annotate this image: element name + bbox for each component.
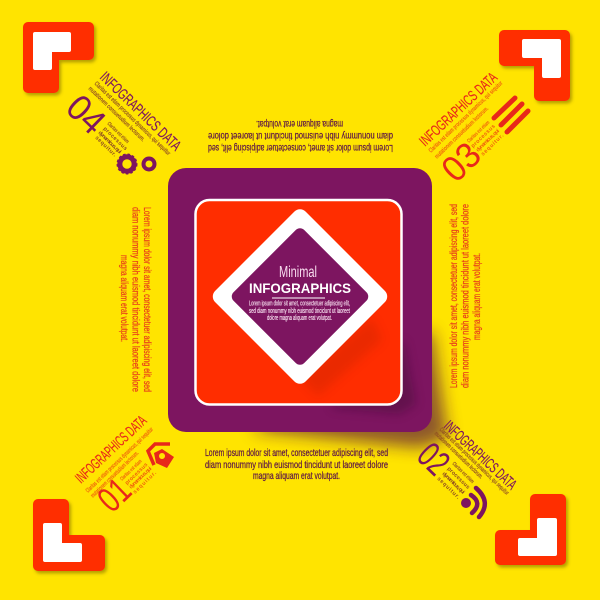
corner tile: bottom right [500, 499, 561, 560]
callout 02: Claritas est etiam [451, 461, 475, 485]
callout 01: sequitur. [132, 470, 158, 495]
bottom text block: Lorem ipsum dolor sit amet, consectetuer adipiscing elit, sed [205, 447, 388, 459]
center heading: Minimal [279, 264, 317, 281]
callout 02 [409, 417, 520, 517]
callout 04: 04 [58, 86, 114, 142]
corner tile: top right [504, 35, 565, 96]
callout 04: Claritas est etiam processus dynamicus, qui sequitur [93, 80, 172, 157]
callout 04: dynamicus, qui [97, 130, 123, 156]
top text block: diam nonummy nibh euismod tincidunt ut laoreet dolore [208, 130, 393, 142]
right text block: Lorem ipsum dolor sit amet, consectetuer adipiscing elit, sed [448, 204, 460, 388]
callout 04: Claritas est etiam [106, 121, 130, 145]
center body text: Lorem ipsum dolor sit amet, consectetuer adipiscing elit, [249, 300, 350, 308]
callout 02: INFOGRAPHICS DATA [440, 417, 520, 493]
callout 04: INFOGRAPHICS DATA [96, 69, 184, 155]
icon: pentagon with chevron [148, 444, 174, 468]
callout 01: mutationem consuetudium lectorum. [90, 450, 141, 499]
callout 01 [72, 412, 174, 520]
icon: three bars [494, 98, 528, 132]
callout 02: Claritas est etiam processus dynamicus, qui sequitur [438, 426, 510, 497]
corner tile: bottom left [38, 504, 100, 566]
center body text: sed diam nonummy nibh euismod tincidunt ut laoreet [249, 308, 350, 315]
callout 03: sequitur. [480, 133, 506, 157]
callout 03: dynamicus, qui [475, 128, 501, 153]
callout 01: processus [124, 462, 149, 486]
callout 03: Claritas est etiam processus dynamicus, qui sequitur [428, 80, 505, 154]
callout 04: mutationem consuetudium lectorum. [87, 85, 146, 143]
callout 02: sequitur. [436, 476, 461, 501]
callout 01: Claritas est etiam [119, 459, 144, 482]
callout 04: processus [102, 126, 128, 152]
left text block: Lorem ipsum dolor sit amet, consectetuer adipiscing elit, sed [141, 207, 153, 392]
top text block: Lorem ipsum dolor sit amet, consectetuer adipiscing elit, sed [208, 142, 393, 154]
callout 01: Claritas est etiam processus dynamicus, qui sequitur [85, 426, 155, 494]
callout 02: processus [446, 466, 471, 491]
central panel shadow [250, 330, 448, 448]
top text block: magna aliquam erat volutpat. [256, 118, 343, 130]
diamond shadow [304, 321, 381, 394]
center body text [249, 300, 350, 322]
callout 02: mutationem consuetudium lectorum. [433, 430, 484, 481]
purple diamond [229, 226, 371, 367]
callout 03: INFOGRAPHICS DATA [416, 69, 501, 150]
inner shadow on purple panel [330, 340, 416, 414]
callout 03: Claritas est etiam [466, 120, 491, 144]
center body text: dolore magna aliquam erat volutpat. [267, 315, 332, 322]
callout 01: dynamicus, qui [128, 466, 154, 490]
callout 02: dynamicus, qui [441, 471, 466, 496]
bottom text block [205, 447, 388, 482]
callout 03 [416, 69, 528, 190]
center heading: INFOGRAPHICS [249, 280, 351, 296]
right text block: diam nonummy nibh euismod tincidunt ut laoreet dolore [460, 204, 472, 388]
callout 04 [58, 69, 184, 174]
white diamond [209, 206, 391, 387]
icon: signal waves [461, 488, 485, 517]
bottom text block: magna aliquam erat volutpat. [253, 470, 340, 482]
callout 01: 01 [89, 469, 139, 520]
red square with white border [196, 200, 402, 404]
central purple panel [168, 168, 432, 432]
right text block: magna aliquam erat volutpat. [471, 253, 483, 340]
callout 01: INFOGRAPHICS DATA [72, 412, 150, 487]
right text block [448, 204, 483, 388]
callout 04: sequitur. [94, 135, 118, 159]
top text block [208, 118, 393, 154]
corner tile: top left [28, 27, 89, 88]
left text block: diam nonummy nibh euismod tincidunt ut laoreet dolore [130, 207, 142, 392]
callout 03: mutationem consuetudium lectorum. [434, 105, 490, 160]
left text block [118, 207, 153, 392]
icon: gears [118, 154, 154, 174]
callout 03: 03 [433, 134, 489, 190]
left text block: magna aliquam erat volutpat. [118, 255, 130, 342]
bottom text block: diam nonummy nibh euismod tincidunt ut laoreet dolore [205, 459, 388, 471]
callout 03: processus [470, 124, 497, 149]
center heading [249, 264, 351, 298]
callout 02: 02 [409, 434, 458, 483]
